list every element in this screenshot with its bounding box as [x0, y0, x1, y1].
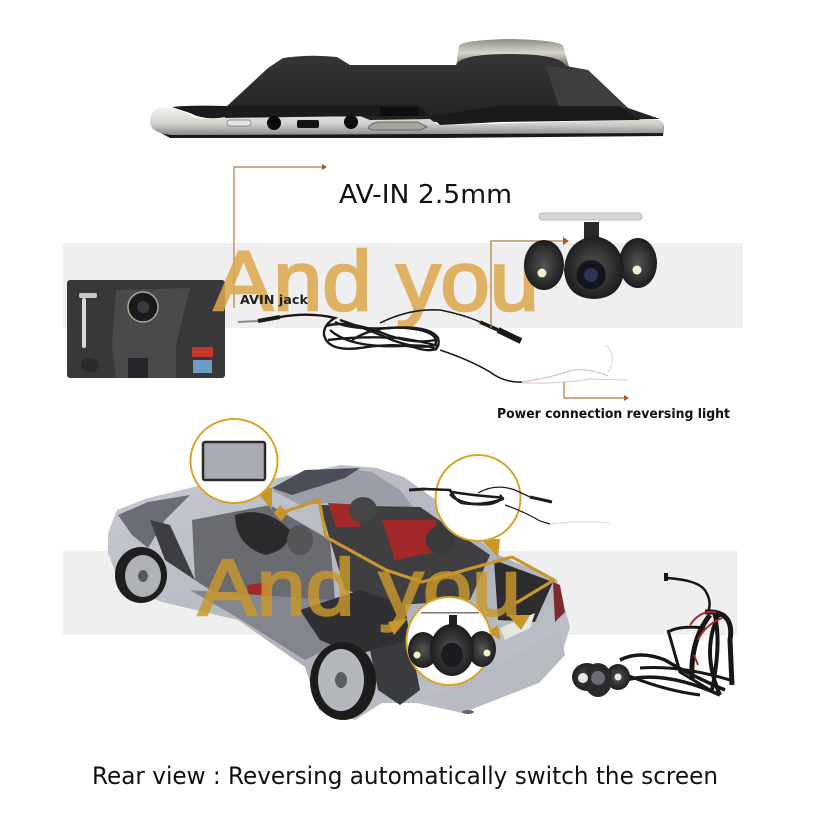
car exhaust: [462, 710, 474, 714]
camera left LED pod: [524, 240, 564, 290]
car rear seat red: [382, 520, 436, 560]
callout: camera: [406, 597, 496, 685]
reversing light power wires: [522, 345, 628, 383]
caption: Rear view : Reversing automatically switch the screen: [92, 762, 718, 790]
callout: cable: [409, 455, 610, 541]
car front seat red: [247, 582, 272, 612]
car interior front: [192, 505, 335, 610]
car license plate: [500, 613, 535, 640]
car engine bay: [118, 495, 190, 548]
watermark band: bottom: [63, 551, 738, 635]
car engine rear section: [370, 640, 420, 705]
car cutaway illustration: [108, 465, 570, 720]
camera LEDs: [538, 268, 546, 278]
car tail light: [553, 582, 565, 622]
car side seat red: [328, 503, 364, 527]
watermark band: top: [63, 243, 743, 328]
car body: [108, 465, 570, 720]
callout camera housing: [430, 624, 474, 676]
watermark: And you bottom: And you: [198, 543, 521, 632]
device camera ring: [456, 39, 570, 70]
label: power connection: Power connection reversing light: [497, 407, 730, 422]
arrowhead: AV-IN: [322, 164, 327, 170]
camera centre housing: [564, 236, 624, 299]
device audio jack: [267, 116, 281, 130]
device dark rear body: [225, 54, 660, 122]
device camera lens: [128, 292, 158, 322]
device silver edge strip: [150, 107, 664, 135]
car rear wheel: [310, 642, 376, 720]
monitor icon: [203, 442, 265, 480]
car cabin: [320, 505, 490, 605]
camera lens: [576, 260, 606, 290]
car trunk: [494, 560, 553, 622]
arrowhead: power: [624, 395, 629, 401]
car rear bumper: [420, 630, 565, 713]
camera right LED pod: [619, 238, 657, 288]
device USB port: [297, 120, 319, 128]
arrow: power connection: [564, 382, 625, 398]
device black wedge: [172, 105, 640, 125]
device AV-IN jack: [344, 115, 358, 129]
device certificates: [192, 347, 213, 357]
callout: monitor: [190, 419, 278, 503]
device side label: [82, 298, 86, 348]
label: AVIN jack: AVIN jack: [240, 293, 309, 307]
device power button: [227, 120, 251, 126]
route arrowheads: [252, 486, 530, 640]
car seat headrests: [349, 497, 377, 523]
kit red wires: [690, 612, 722, 665]
watermark: And you top: And you: [214, 234, 539, 328]
AV cable with coil: [238, 310, 522, 382]
camera mounting plate: [539, 213, 642, 220]
device volume button: [368, 122, 427, 130]
device front view: [67, 280, 225, 378]
arrow: AV-IN jack to device: [234, 167, 322, 308]
wiring route on car: [281, 500, 554, 603]
rear camera kit with cable: [572, 577, 732, 697]
car front wheel: [115, 547, 167, 603]
cable coil: [409, 487, 610, 524]
heading: AV-IN 2.5mm: AV-IN 2.5mm: [339, 180, 512, 210]
kit camera: [572, 663, 602, 691]
car lower door: [190, 590, 345, 660]
arrowhead: camera: [563, 237, 569, 245]
kit cable bundle: [620, 577, 732, 695]
rear camera with LEDs: [524, 213, 657, 299]
camera stem: [584, 222, 599, 240]
arrow: camera to cable: [491, 241, 564, 328]
device bottom shadow edge: [152, 126, 664, 138]
callout camera pods: [408, 632, 438, 668]
callout bracket: [421, 612, 479, 614]
device side view with ports: [150, 39, 664, 138]
car roof glass: [272, 468, 415, 510]
